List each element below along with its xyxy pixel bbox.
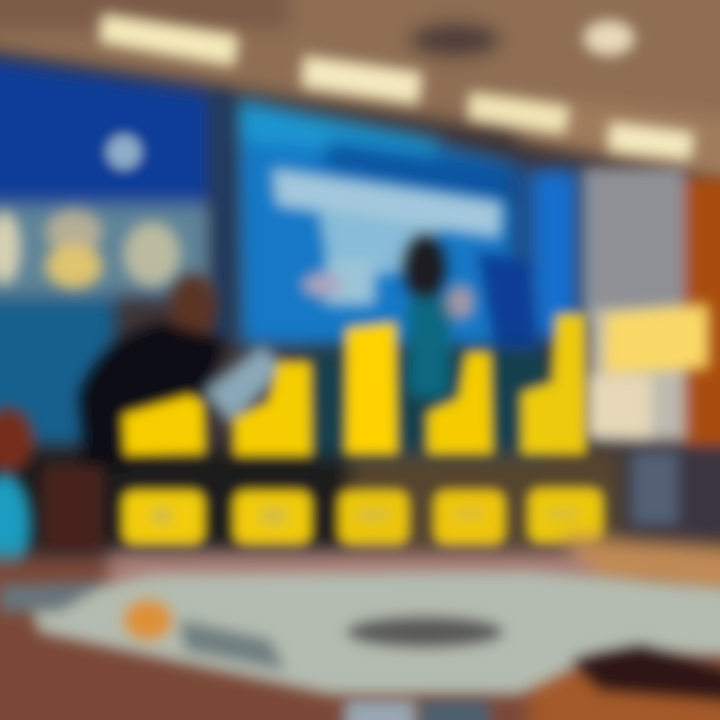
- bar 5: [521, 314, 586, 454]
- label 5: [528, 488, 603, 543]
- label 2: [233, 490, 312, 545]
- open document on table: [0, 572, 720, 694]
- left screen icons: [0, 210, 180, 288]
- bar 1: [122, 394, 205, 456]
- centre screen heading glow: [272, 168, 502, 305]
- bar 4: [427, 352, 493, 454]
- panel: centre blue screen: [236, 98, 578, 350]
- panel: left blue screen: [0, 55, 212, 446]
- right presenter: [403, 234, 474, 398]
- label 3: [338, 490, 409, 545]
- right wall: orange wood: [582, 168, 720, 540]
- left screen dot: [106, 134, 142, 170]
- label 1: [122, 490, 205, 545]
- label box text smudges: [152, 508, 578, 524]
- bar chart: yellow bars: [122, 314, 586, 456]
- centre lower right dark blue: [478, 252, 540, 360]
- lower dark band: [0, 350, 620, 550]
- row of yellow label boxes: [122, 488, 603, 545]
- table surface: [0, 535, 720, 720]
- left presenter: [78, 273, 285, 475]
- ceiling: [0, 0, 720, 190]
- ceiling lights: [100, 14, 694, 160]
- label 4: [434, 490, 505, 545]
- glowing yellow sign on right: [590, 304, 708, 436]
- screen pink smudge: [302, 273, 342, 297]
- bar 3: [345, 322, 398, 454]
- document details: [124, 600, 720, 720]
- bar 2: [234, 362, 312, 456]
- divider between screens: [214, 90, 232, 340]
- left foreground object: [0, 408, 104, 575]
